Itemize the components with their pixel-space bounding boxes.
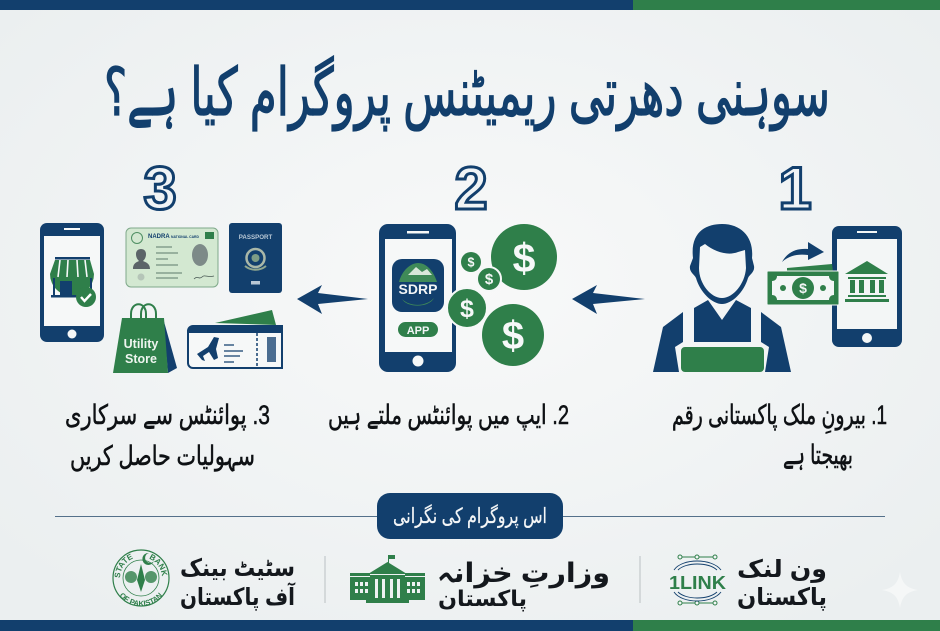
icon: NADRA card	[126, 228, 218, 287]
icon: NADRA card: NATIONAL CARD	[171, 235, 199, 239]
icon: Utility Store bag: Utility	[124, 337, 158, 351]
logo: State Bank seal: BANK	[149, 554, 168, 576]
step number 3: 3	[143, 155, 177, 222]
logo: 1LINK: 1LINK	[669, 572, 727, 593]
panel: step 2	[379, 155, 557, 372]
icon: phone with SDRP app: SDRP	[399, 281, 437, 297]
text: One Link Pakistan	[737, 556, 827, 611]
text: State Bank of Pakistan: سٹیٹ بینک	[180, 555, 295, 582]
icon: phone with SDRP app	[379, 224, 456, 372]
icon: dollar coins: $	[502, 314, 524, 358]
step number 1: 1	[778, 155, 812, 222]
text: Ministry of Finance Pakistan	[437, 558, 610, 612]
caption: step 1	[672, 400, 887, 471]
icon: dollar coins: $	[485, 271, 494, 288]
text: One Link Pakistan: پاکستان	[737, 584, 827, 611]
sparkle mark	[882, 572, 918, 608]
arrow: step 2 to step 3	[297, 285, 368, 314]
text: One Link Pakistan: ون لنک	[737, 556, 827, 583]
panel: step 1	[653, 155, 902, 372]
panel: step 3	[40, 155, 282, 373]
icon: Utility Store bag	[113, 304, 177, 373]
text: Ministry of Finance Pakistan: پاکستان	[438, 586, 527, 612]
heading pill: programme oversight	[377, 493, 563, 539]
icon: dollar coins	[447, 224, 557, 366]
icon: cash note: $	[799, 280, 807, 296]
icon: dollar coins: $	[460, 295, 474, 323]
icon: plane ticket	[188, 310, 282, 368]
text: Ministry of Finance Pakistan: وزارتِ خزانہ	[437, 558, 610, 589]
icon: passport	[229, 223, 282, 293]
bottom colour bar	[0, 620, 940, 631]
icon: phone with shop	[40, 223, 104, 342]
heading pill: programme oversight: اس پروگرام کی نگرانی	[393, 504, 547, 528]
logo: State Bank seal	[112, 549, 170, 607]
caption: step 3: سہولیات حاصل کریں	[70, 441, 255, 472]
logo: Ministry of Finance building	[350, 555, 425, 603]
arrow: step 1 to step 2	[572, 285, 645, 314]
icon: cash note	[767, 264, 839, 305]
logo: State Bank seal: STATE	[114, 554, 133, 578]
icon: dollar coins: $	[468, 256, 475, 270]
icon: remitter person	[653, 224, 791, 372]
icon: phone with bank	[832, 226, 902, 347]
logo: State Bank seal: OF PAKISTAN	[120, 592, 162, 606]
text: State Bank of Pakistan	[180, 555, 296, 611]
icon: NADRA card: NADRA	[148, 234, 170, 240]
caption: step 2: 2. ایپ میں پوائنٹس ملتے ہیں	[328, 400, 569, 431]
caption: step 3: 3. پوائنٹس سے سرکاری	[65, 400, 270, 431]
text: State Bank of Pakistan: آف پاکستان	[180, 582, 296, 611]
icon: phone with SDRP app: APP	[407, 325, 429, 337]
caption: step 3	[65, 400, 270, 472]
icon: dollar coins: $	[513, 235, 536, 281]
caption: step 1: بھیجتا ہے	[783, 440, 853, 471]
top colour bar	[0, 0, 940, 10]
arrow: money to bank	[782, 242, 824, 262]
logo: 1LINK	[669, 555, 727, 605]
icon: passport: PASSPORT	[239, 234, 273, 241]
icon: Utility Store bag: Store	[125, 352, 157, 366]
step number 2: 2	[454, 155, 488, 222]
